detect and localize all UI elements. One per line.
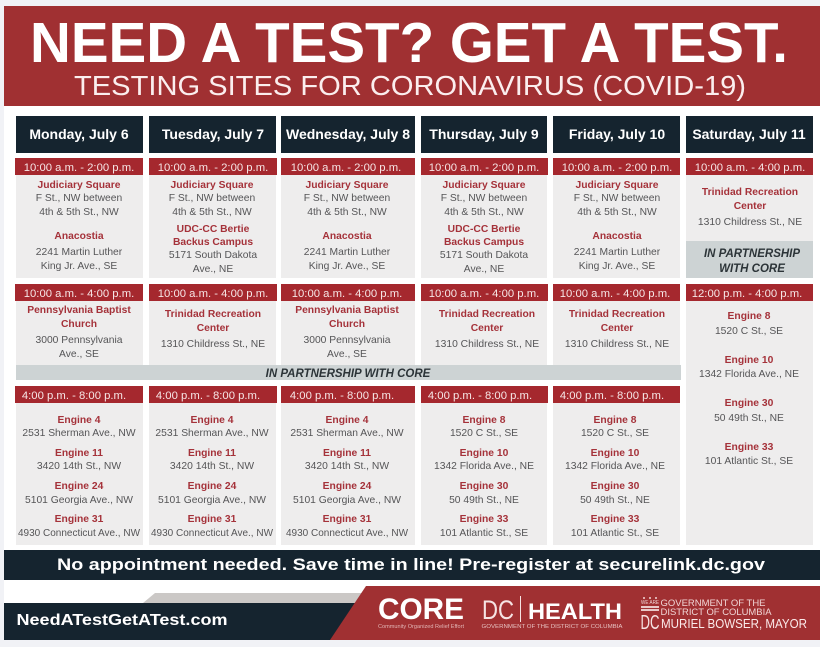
midday block: Monday: 10:00 a.m. - 4:00 p.m.: [24, 288, 134, 300]
morning block: Thursday: Backus Campus: [444, 237, 524, 248]
morning block: Thursday: [421, 158, 548, 278]
logo: Government of DC: DISTRICT OF COLUMBIA: [660, 607, 772, 618]
midday block: Thursday: [421, 284, 548, 365]
midday block: Thursday: Center: [471, 323, 503, 334]
morning block: Tuesday: Ave., NE: [193, 264, 233, 275]
morning block: Tuesday: [149, 158, 277, 278]
footer logo band: [330, 586, 820, 640]
midday block: Friday: Trinidad Recreation: [569, 309, 665, 320]
evening block: Wednesday: Engine 24: [323, 481, 372, 492]
midday block: Thursday: 10:00 a.m. - 4:00 p.m.: [429, 288, 539, 300]
evening block: Monday: 3420 14th St., NW: [37, 461, 121, 472]
morning block: Friday: Judiciary Square: [576, 180, 659, 191]
afternoon block: Saturday: Engine 33: [725, 442, 774, 453]
morning block: Thursday: UDC-CC Bertie: [448, 224, 521, 235]
title: NEED A TEST? GET A TEST.: [30, 11, 788, 75]
evening block: Friday: Engine 8: [594, 415, 637, 426]
evening block: Monday: 5101 Georgia Ave., NW: [25, 495, 133, 506]
evening block: Friday: 1342 Florida Ave., NE: [565, 461, 665, 472]
evening block: Thursday: Engine 8: [463, 415, 506, 426]
morning block: Thursday: 10:00 a.m. - 2:00 p.m.: [429, 162, 539, 174]
evening block: Tuesday: Engine 4: [191, 415, 234, 426]
evening block: Friday: Engine 33: [591, 514, 640, 525]
morning block: Monday: F St., NW between: [36, 193, 122, 204]
midday block: Wednesday: Church: [329, 319, 365, 330]
evening block: Wednesday: Engine 31: [323, 514, 372, 525]
morning block: Saturday: 10:00 a.m. - 4:00 p.m.: [695, 162, 805, 174]
morning block: Monday: 4th & 5th St., NW: [39, 207, 119, 218]
evening block: Monday: Engine 4: [58, 415, 101, 426]
evening block: Tuesday: Engine 31: [188, 514, 237, 525]
morning block: Friday: 2241 Martin Luther: [574, 247, 661, 258]
midday block: Monday: 3000 Pennsylvania: [35, 335, 123, 346]
logo: Government of DC: DC: [640, 612, 660, 634]
midday block: Tuesday: Trinidad Recreation: [165, 309, 261, 320]
logo: Government of DC: WE ARE: [641, 600, 660, 606]
morning block: Thursday: Judiciary Square: [443, 180, 526, 191]
logo: DC Health: GOVERNMENT OF THE DISTRICT OF COLUMBIA: [482, 624, 623, 630]
morning block: Thursday: 5171 South Dakota: [440, 250, 528, 261]
partnership strip: [16, 365, 681, 380]
morning block: Tuesday: UDC-CC Bertie: [177, 224, 250, 235]
morning block: Tuesday: 4th & 5th St., NW: [172, 207, 252, 218]
evening block: Tuesday: 2531 Sherman Ave., NW: [155, 428, 269, 439]
midday block: Friday: Center: [601, 323, 633, 334]
day header row: Tuesday, July 7: [162, 126, 264, 142]
midday block: Tuesday: 1310 Childress St., NE: [161, 339, 265, 350]
evening block: Wednesday: 4930 Connecticut Ave., NW: [286, 528, 408, 539]
evening block: Wednesday: 4:00 p.m. - 8:00 p.m.: [290, 390, 394, 402]
logo: DC Health: [482, 595, 623, 630]
morning block: Saturday: 1310 Childress St., NE: [698, 217, 802, 228]
morning block: Friday: 10:00 a.m. - 2:00 p.m.: [562, 162, 672, 174]
logo: Government of DC: [640, 597, 807, 634]
evening block: Wednesday: 3420 14th St., NW: [305, 461, 389, 472]
evening block: Tuesday: 4:00 p.m. - 8:00 p.m.: [156, 390, 260, 402]
morning block: Wednesday: 2241 Martin Luther: [304, 247, 391, 258]
morning block: Wednesday: F St., NW between: [304, 193, 390, 204]
partnership callout: Saturday: [686, 241, 813, 278]
morning block: Monday: 10:00 a.m. - 2:00 p.m.: [24, 162, 134, 174]
midday block: Wednesday: [281, 284, 415, 365]
evening block: Wednesday: 5101 Georgia Ave., NW: [293, 495, 401, 506]
afternoon block: Saturday: 50 49th St., NE: [714, 413, 784, 424]
morning block: Saturday: Trinidad Recreation: [702, 187, 798, 198]
morning block: Monday: 2241 Martin Luther: [36, 247, 123, 258]
pre-register banner: No appointment needed. Save time in line! Pre-register at securelink.dc.gov: [57, 555, 766, 574]
logo: CORE: CORE: [378, 593, 464, 626]
midday block: Friday: 10:00 a.m. - 4:00 p.m.: [560, 288, 670, 300]
morning block: Friday: [553, 158, 680, 278]
morning block: Thursday: 4th & 5th St., NW: [444, 207, 524, 218]
afternoon block: Saturday: 101 Atlantic St., SE: [705, 456, 793, 467]
header banner: [4, 6, 820, 106]
midday block: Tuesday: 10:00 a.m. - 4:00 p.m.: [158, 288, 268, 300]
morning block: Wednesday: [281, 158, 415, 278]
evening block: Wednesday: [281, 386, 415, 545]
partnership callout: Saturday: WITH CORE: [719, 263, 785, 275]
morning block: Monday: Anacostia: [54, 231, 104, 242]
logo: DC Health: DC: [482, 595, 514, 625]
morning block: Friday: F St., NW between: [574, 193, 660, 204]
day header row: Friday, July 10: [569, 126, 665, 142]
evening block: Monday: Engine 24: [55, 481, 104, 492]
evening block: Thursday: 1520 C St., SE: [450, 428, 518, 439]
morning block: Wednesday: King Jr. Ave., SE: [309, 261, 385, 272]
evening block: Thursday: Engine 33: [460, 514, 509, 525]
morning block: Friday: 4th & 5th St., NW: [577, 207, 657, 218]
afternoon block: Saturday: Engine 8: [728, 311, 771, 322]
morning block: Saturday: [686, 158, 813, 241]
evening block: Tuesday: 3420 14th St., NW: [170, 461, 254, 472]
morning block: Tuesday: 10:00 a.m. - 2:00 p.m.: [158, 162, 268, 174]
morning block: Wednesday: 10:00 a.m. - 2:00 p.m.: [291, 162, 401, 174]
evening block: Monday: Engine 31: [55, 514, 104, 525]
evening block: Monday: 2531 Sherman Ave., NW: [22, 428, 136, 439]
morning block: Thursday: F St., NW between: [441, 193, 527, 204]
evening block: Friday: 1520 C St., SE: [581, 428, 649, 439]
day header row: Wednesday, July 8: [286, 126, 410, 142]
evening block: Thursday: 1342 Florida Ave., NE: [434, 461, 534, 472]
morning block: Tuesday: F St., NW between: [169, 193, 255, 204]
morning block: Monday: [15, 158, 143, 278]
day header row: Monday, July 6: [29, 126, 129, 142]
midday block: Monday: [15, 284, 143, 365]
midday block: Wednesday: 10:00 a.m. - 4:00 p.m.: [292, 288, 402, 300]
evening block: Monday: [15, 386, 143, 545]
evening block: Thursday: [421, 386, 548, 545]
midday block: Tuesday: [149, 284, 277, 365]
pre-register banner: [4, 550, 820, 580]
midday block: Wednesday: Ave., SE: [327, 349, 367, 360]
footer website bar: NeedATestGetATest.com: [16, 612, 228, 629]
logo: CORE: Community Organized Relief Effort: [378, 624, 465, 630]
morning block: Tuesday: Judiciary Square: [171, 180, 254, 191]
evening block: Thursday: Engine 10: [460, 448, 509, 459]
morning block: Saturday: Center: [734, 201, 766, 212]
evening block: Tuesday: [149, 386, 277, 545]
afternoon block: Saturday: Engine 30: [725, 398, 774, 409]
midday block: Thursday: 1310 Childress St., NE: [435, 339, 539, 350]
footer website bar: [4, 593, 370, 640]
evening block: Thursday: 4:00 p.m. - 8:00 p.m.: [428, 390, 532, 402]
morning block: Tuesday: 5171 South Dakota: [169, 250, 257, 261]
midday block: Friday: [553, 284, 680, 365]
subtitle: TESTING SITES FOR CORONAVIRUS (COVID-19): [74, 70, 746, 101]
morning block: Wednesday: 4th & 5th St., NW: [307, 207, 387, 218]
midday block: Wednesday: 3000 Pennsylvania: [303, 335, 391, 346]
evening block: Friday: [553, 386, 680, 545]
day header row: [16, 116, 813, 153]
evening block: Wednesday: Engine 11: [323, 448, 371, 459]
day header row: Saturday, July 11: [692, 126, 806, 142]
morning block: Friday: Anacostia: [592, 231, 642, 242]
day header row: Thursday, July 9: [429, 126, 539, 142]
afternoon block: Saturday: [686, 284, 813, 545]
midday block: Thursday: Trinidad Recreation: [439, 309, 535, 320]
evening block: Wednesday: Engine 4: [326, 415, 369, 426]
evening block: Friday: Engine 10: [591, 448, 640, 459]
evening block: Monday: 4930 Connecticut Ave., NW: [18, 528, 140, 539]
logo: Government of DC: GOVERNMENT OF THE: [660, 598, 766, 609]
evening block: Friday: 4:00 p.m. - 8:00 p.m.: [560, 390, 664, 402]
midday block: Tuesday: Center: [197, 323, 229, 334]
evening block: Tuesday: Engine 11: [188, 448, 236, 459]
partnership strip: IN PARTNERSHIP WITH CORE: [266, 368, 431, 380]
morning block: Monday: Judiciary Square: [38, 180, 121, 191]
morning block: Monday: King Jr. Ave., SE: [41, 261, 117, 272]
evening block: Friday: 101 Atlantic St., SE: [571, 528, 659, 539]
evening block: Thursday: Engine 30: [460, 481, 509, 492]
midday block: Monday: Church: [61, 319, 97, 330]
evening block: Tuesday: 4930 Connecticut Ave., NW: [151, 528, 273, 539]
morning block: Wednesday: Anacostia: [322, 231, 372, 242]
evening block: Wednesday: 2531 Sherman Ave., NW: [290, 428, 404, 439]
morning block: Tuesday: Backus Campus: [173, 237, 253, 248]
midday block: Friday: 1310 Childress St., NE: [565, 339, 669, 350]
afternoon block: Saturday: 1520 C St., SE: [715, 326, 783, 337]
logo: DC Health: HEALTH: [528, 599, 622, 624]
evening block: Monday: 4:00 p.m. - 8:00 p.m.: [22, 390, 126, 402]
evening block: Friday: Engine 30: [591, 481, 640, 492]
evening block: Thursday: 50 49th St., NE: [449, 495, 519, 506]
afternoon block: Saturday: 12:00 p.m. - 4:00 p.m.: [692, 288, 802, 300]
afternoon block: Saturday: 1342 Florida Ave., NE: [699, 369, 799, 380]
morning block: Wednesday: Judiciary Square: [306, 180, 389, 191]
partnership callout: Saturday: IN PARTNERSHIP: [704, 248, 800, 260]
morning block: Thursday: Ave., NE: [464, 264, 504, 275]
evening block: Friday: 50 49th St., NE: [580, 495, 650, 506]
evening block: Monday: Engine 11: [55, 448, 103, 459]
evening block: Thursday: 101 Atlantic St., SE: [440, 528, 528, 539]
evening block: Tuesday: 5101 Georgia Ave., NW: [158, 495, 266, 506]
afternoon block: Saturday: Engine 10: [725, 355, 774, 366]
midday block: Wednesday: Pennsylvania Baptist: [295, 305, 399, 316]
morning block: Friday: King Jr. Ave., SE: [579, 261, 655, 272]
midday block: Monday: Ave., SE: [59, 349, 99, 360]
midday block: Monday: Pennsylvania Baptist: [27, 305, 131, 316]
evening block: Tuesday: Engine 24: [188, 481, 237, 492]
